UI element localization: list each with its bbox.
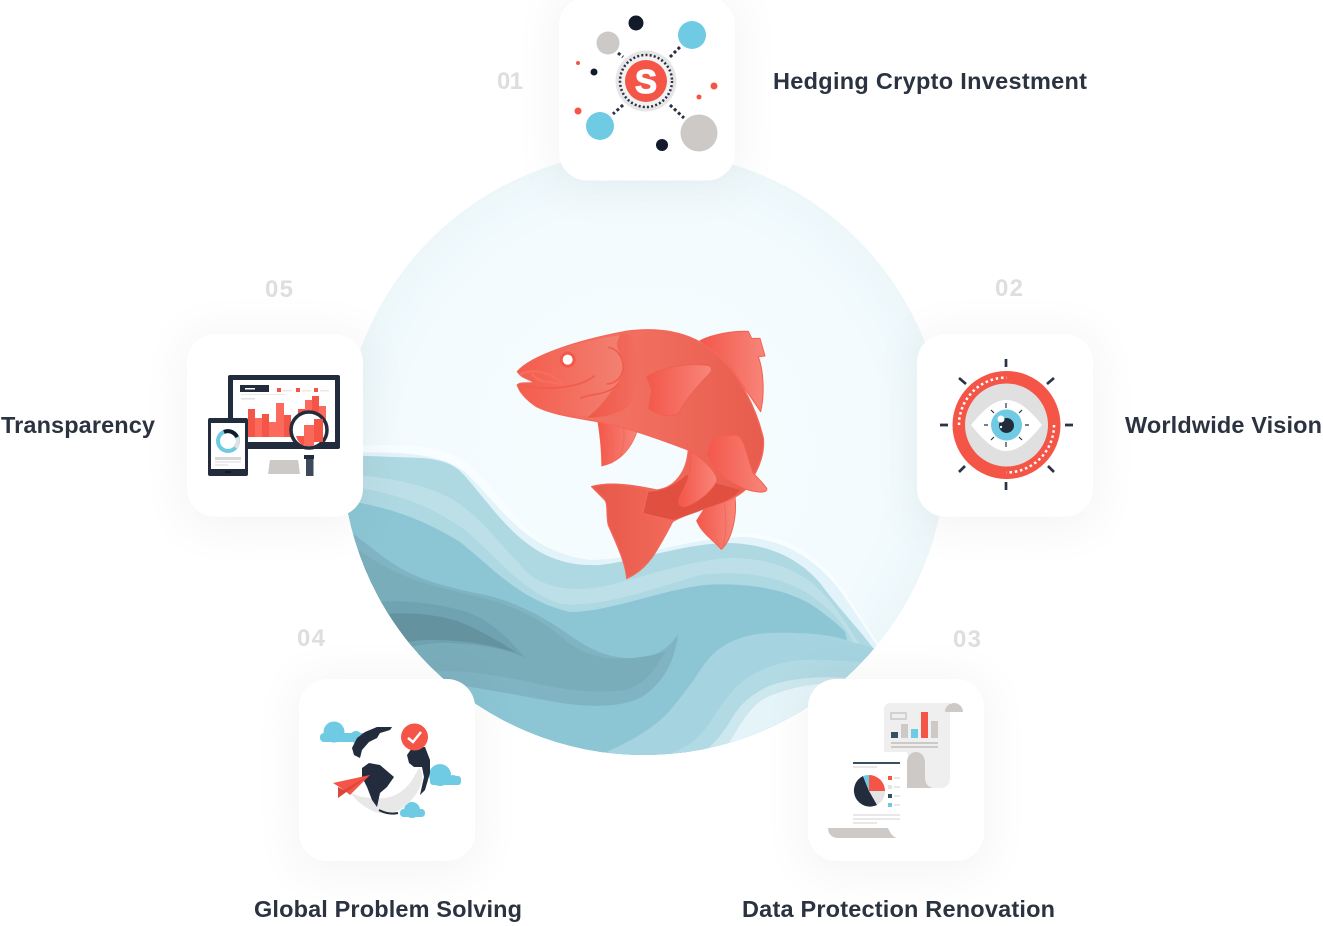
icon: eye — [940, 359, 1073, 490]
pelvic fin — [707, 435, 767, 492]
icon: network crypto token — [574, 16, 718, 152]
fin ribs — [608, 424, 726, 545]
card 04 with icon — [299, 679, 475, 861]
number 01: 01 — [497, 68, 523, 95]
anal fin — [679, 452, 717, 507]
continents — [352, 727, 392, 758]
mouth — [520, 371, 563, 384]
eye — [560, 352, 576, 368]
globe shading — [350, 768, 422, 813]
background disc with waves — [330, 151, 946, 770]
card 03 with icon — [808, 679, 984, 861]
card 05 with icon — [187, 334, 363, 516]
icon: globe with plane — [320, 722, 461, 818]
pectoral fin — [647, 365, 711, 416]
card 01 with icon — [559, 0, 735, 180]
label: Hedging Crypto Investment: Hedging Crypto Investment — [773, 68, 1087, 94]
tail fin — [592, 484, 673, 578]
number 05: 05 — [265, 276, 293, 303]
icon: network crypto token: S — [635, 63, 657, 100]
body — [517, 330, 764, 578]
label: Data Protection Renovation: Data Protection Renovation — [742, 896, 1055, 922]
icon: reports — [828, 703, 963, 838]
clouds — [320, 722, 461, 818]
label: Transparency: Transparency — [1, 412, 155, 438]
head — [517, 335, 624, 417]
card 02 with icon — [917, 334, 1093, 516]
icon: dashboards — [208, 375, 340, 476]
label: Global Problem Solving: Global Problem Solving — [254, 896, 522, 922]
tail base — [643, 475, 740, 520]
gill — [587, 333, 637, 418]
fish — [517, 330, 767, 578]
number 03: 03 — [953, 626, 981, 653]
number 02: 02 — [995, 275, 1023, 302]
label: Worldwide Vision: Worldwide Vision — [1125, 412, 1322, 438]
number 04: 04 — [297, 625, 326, 652]
card shadows — [187, 0, 1093, 869]
lower fin — [697, 497, 736, 549]
belly fin — [598, 421, 637, 466]
dorsal fin — [700, 331, 765, 412]
